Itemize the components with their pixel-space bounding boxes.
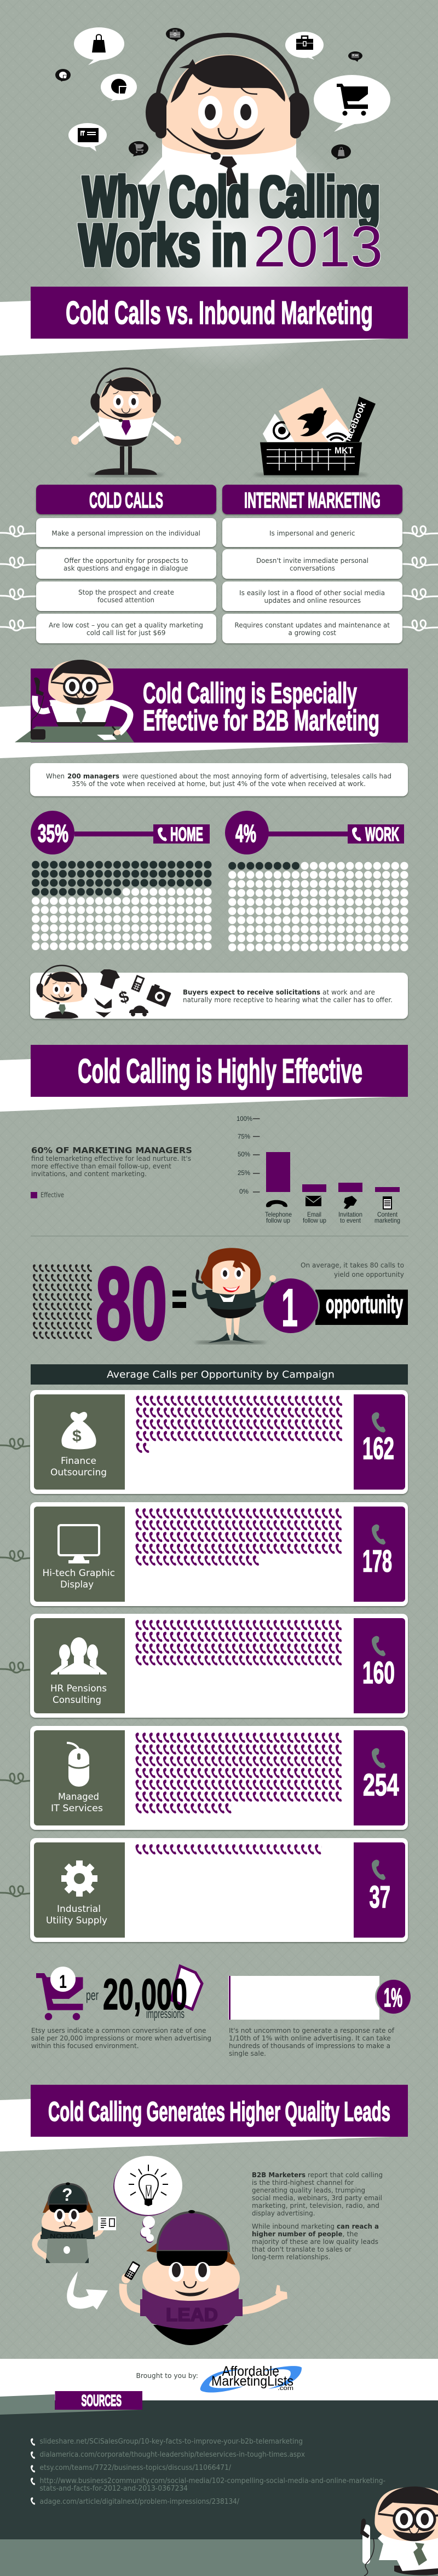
stat: 1 per 20,000: per xyxy=(86,1987,99,2003)
stat: 1% bar: 1% xyxy=(384,1984,402,2013)
character: lead xyxy=(122,2210,287,2345)
text block: b2b marketers: is the third-highest channel for xyxy=(252,2179,354,2187)
phone icons xyxy=(136,1844,322,1856)
panel: cold calls header xyxy=(36,485,216,514)
decorative squiggles xyxy=(0,526,438,631)
text block: etsy: Etsy users indicate a common conversion rate of one xyxy=(31,2027,206,2034)
section: hero xyxy=(55,27,390,372)
arrow xyxy=(67,2271,108,2310)
stat: 1 per 20,000: 1 xyxy=(59,1972,67,1992)
panel: industrial utility supply: Industrial xyxy=(57,1904,101,1915)
source list: etsy.com/teams/7722/business-topics/discuss/11066471/ xyxy=(39,2464,232,2472)
text block: b2b marketers: generating quality leads, trumping xyxy=(252,2187,365,2194)
character: lead: LEAD xyxy=(166,2305,218,2325)
icon: bikini xyxy=(94,998,112,1017)
panel: white swoosh 4 xyxy=(0,2099,400,2151)
callout: buyers expect: Buyers expect to receive solicitations xyxy=(183,988,320,996)
panel: managed it services xyxy=(30,1726,408,1830)
icon: light bulb xyxy=(129,2165,168,2199)
panel: comparison rows: focused attention xyxy=(97,596,154,604)
panel: hr pensions consulting: 160 xyxy=(362,1655,395,1690)
mini bubble: briefcase xyxy=(166,28,185,42)
panel: industrial utility supply xyxy=(30,1838,408,1942)
dot chart: home xyxy=(31,860,212,951)
text block: b2b marketers: display advertising. xyxy=(252,2209,315,2217)
character: normal prospect xyxy=(34,2183,116,2263)
source list xyxy=(31,2438,385,2506)
text block: on average: On average, it takes 80 calls to xyxy=(301,1261,404,1269)
text block: online advertising: single sale. xyxy=(229,2050,266,2057)
text block: b2b marketers: marketing, print, television, radio, and xyxy=(252,2202,379,2209)
legend xyxy=(31,1191,64,1199)
speech bubble: shopping cart xyxy=(314,75,390,132)
bar chart: Invitation xyxy=(338,1211,362,1218)
bar chart: 75% xyxy=(238,1132,250,1140)
mini bubble: news xyxy=(348,51,362,62)
panel: comparison rows: updates and online resources xyxy=(264,597,361,604)
character: standing telemarketer xyxy=(71,369,181,477)
text block: b2b marketers: report that cold calling xyxy=(308,2171,383,2179)
bar chart: 100% xyxy=(237,1115,252,1123)
panel: comparison rows: Is impersonal and generic xyxy=(269,530,355,537)
text block: etsy: within this focused environment. xyxy=(31,2042,139,2050)
phone icons xyxy=(136,1732,343,1815)
heading: cold calls vs inbound xyxy=(31,287,408,339)
stat: 1 opportunity xyxy=(263,1278,408,1338)
bar chart: Telephone xyxy=(265,1211,292,1218)
panel: finance outsourcing: Finance xyxy=(61,1456,96,1467)
stat: 1 per 20,000: 20,000 xyxy=(103,1970,187,2019)
bar chart: Content xyxy=(377,1211,398,1218)
equals sign xyxy=(172,1290,186,1308)
logo: Affordable xyxy=(222,2364,279,2379)
callout: buyers expect: at work and are xyxy=(322,988,375,996)
text block: 60% of managers: more effective than email follow-up, event xyxy=(31,1162,171,1170)
icon: pushpin xyxy=(344,1196,357,1209)
logo xyxy=(200,2364,302,2393)
heading: highly effective xyxy=(31,1045,408,1097)
mini bubble: bag xyxy=(331,144,351,160)
panel: white swoosh 1 xyxy=(0,301,400,356)
thought bubble: lightbulb xyxy=(113,2156,182,2243)
text block: b2b marketers xyxy=(252,2171,383,2261)
heading: sources: SOURCES xyxy=(81,2392,122,2410)
icon: shirt xyxy=(100,969,120,989)
icon: marketing basket xyxy=(253,388,376,477)
character: woman on phone xyxy=(194,1248,276,1344)
text block: 60% of managers: 60% OF MARKETING MANAGERS xyxy=(31,1145,192,1155)
icon: notepad xyxy=(383,1196,392,1210)
panel: sponsor band: Brought to you by: xyxy=(136,2372,198,2380)
character: normal prospect: NORMAL xyxy=(50,2232,86,2240)
callout: 200 managers: When xyxy=(46,772,65,780)
panel: hi-tech graphic display: 178 xyxy=(362,1544,392,1579)
callout: 200 managers: 200 managers xyxy=(67,772,119,780)
dot chart: work xyxy=(228,861,409,952)
icon: mobile phone xyxy=(131,975,145,992)
icon: camera xyxy=(146,983,172,1007)
panel: finance outsourcing: 162 xyxy=(362,1431,394,1466)
stat: 1 per 20,000: impressions xyxy=(146,2007,185,2021)
panel: comparison rows: ask questions and engage in dialogue xyxy=(64,565,188,572)
panel: finance outsourcing: Outsourcing xyxy=(50,1467,107,1478)
panel: internet marketing header xyxy=(222,485,402,514)
panel: industrial utility supply: Utility Supply xyxy=(46,1915,107,1926)
phone icons xyxy=(136,1395,343,1454)
source list: slideshare.net/SCiSalesGroup/10-key-facts-to-improve-your-b2b-telemarketing xyxy=(39,2438,303,2446)
stat: 1 per 20,000 xyxy=(36,1966,202,2021)
icon: document xyxy=(171,1966,202,2009)
stat: 35% home xyxy=(31,811,210,854)
bar chart: 50% xyxy=(238,1150,250,1158)
text block: b2b marketers: , the xyxy=(343,2230,358,2238)
mini bubble: cart xyxy=(129,141,148,156)
stat: 35% home: 35% xyxy=(38,819,68,847)
stat: 4% work xyxy=(225,811,404,854)
source list: http://www.business2community.com/social-media/102-compelling-social-media-and-online-marketing- xyxy=(39,2477,385,2485)
text block: b2b marketers: that don't translate to sales or xyxy=(252,2246,351,2253)
text block: 60% of managers xyxy=(31,1145,192,1178)
panel: comparison rows xyxy=(36,518,402,643)
text block: b2b marketers: While inbound marketing xyxy=(252,2223,335,2230)
speech bubble: briefcase xyxy=(285,32,324,60)
bar chart: follow up xyxy=(266,1217,290,1224)
panel: hi-tech graphic display: Hi-tech Graphic xyxy=(43,1568,115,1579)
panel: comparison rows: cold call list for just $69 xyxy=(87,629,165,637)
text block: b2b marketers: B2B Marketers xyxy=(252,2171,306,2179)
logo: .com xyxy=(278,2385,293,2392)
source list: adage.com/article/digitalnext/problem-impressions/238134/ xyxy=(39,2498,240,2506)
bar chart: marketing xyxy=(374,1217,400,1224)
panel: comparison rows: Is easily lost in a flood of other social media xyxy=(239,589,385,597)
phone icons xyxy=(136,1620,343,1667)
title year: 2013 xyxy=(253,214,383,279)
text block: b2b marketers: social media, webinars, 3rd party email xyxy=(252,2194,382,2202)
panel: hi-tech graphic display: Display xyxy=(60,1579,94,1590)
panel: comparison rows: Requires constant updates and maintenance at xyxy=(234,621,390,629)
mini bubble: pie chart xyxy=(55,69,71,82)
heading: sources xyxy=(55,2391,142,2410)
panel: finance outsourcing xyxy=(30,1390,408,1494)
panel: hr pensions consulting: HR Pensions xyxy=(50,1683,107,1694)
stat: 1% bar xyxy=(228,1976,411,2020)
text block: on average xyxy=(301,1261,404,1278)
icon: gear xyxy=(54,1853,105,1904)
callout: 200 managers xyxy=(30,763,408,796)
text block: b2b marketers: majority of these are low quality leads xyxy=(252,2238,378,2246)
panel: hi-tech graphic display xyxy=(30,1502,408,1606)
panel: cold calls header: COLD CALLS xyxy=(89,489,163,513)
callout: 200 managers: 35% of the vote when received at home, but just 4% of the vote when received at work. xyxy=(72,780,366,788)
heading: average calls: Average Calls per Opportunity by Campaign xyxy=(107,1369,335,1381)
panel: comparison rows: Offer the opportunity for prospects to xyxy=(64,557,188,565)
source list: dialamerica.com/corporate/thought-leadership/teleservices-in-tough-times.aspx xyxy=(39,2451,305,2459)
icon: mouse xyxy=(67,1743,89,1787)
phone icons xyxy=(136,1508,343,1567)
speech bubble: pie chart xyxy=(101,74,137,101)
stat: 35% home: HOME xyxy=(170,824,203,845)
bar chart: follow up xyxy=(303,1217,326,1224)
panel: hr pensions consulting: Consulting xyxy=(53,1695,101,1706)
icon: envelope xyxy=(306,1196,321,1206)
text block: b2b marketers: higher number of people xyxy=(252,2230,343,2238)
panel: industrial utility supply: 37 xyxy=(369,1880,390,1915)
heading: quality leads xyxy=(31,2085,408,2137)
text block: online advertising: hundreds of thousands of impressions to make a xyxy=(229,2042,390,2050)
bar chart: Email xyxy=(307,1211,321,1218)
title: Works in xyxy=(79,212,247,279)
panel: comparison rows: conversations xyxy=(290,565,335,572)
text block: 60% of managers: find telemarketing effective for lead nurture. It's xyxy=(31,1155,191,1162)
bar chart xyxy=(237,1115,400,1224)
text block: online advertising: 1/10th of 1% with online advertising. It can take xyxy=(229,2034,391,2042)
stat: 1 opportunity: 1 xyxy=(281,1278,298,1338)
character: headset man xyxy=(36,966,87,1019)
icon: business card xyxy=(98,2217,116,2230)
panel: comparison rows: Make a personal impression on the individual xyxy=(51,530,200,537)
icon: dollar: $ xyxy=(117,987,131,1008)
icon: marketing basket: MKT xyxy=(335,445,354,456)
speech bubble: shopping bag xyxy=(74,27,124,65)
callout: 200 managers: were questioned about the most annoying form of advertising, telesales calls had xyxy=(123,772,391,780)
character: normal prospect: ? xyxy=(62,2185,73,2205)
text block: 60% of managers: invitations, and content marketing. xyxy=(31,1170,147,1178)
icon: money bag: $ xyxy=(72,1427,82,1445)
big number 80: 80 xyxy=(96,1247,167,1360)
text block: on average: yield one opportunity xyxy=(334,1271,404,1278)
bar chart: 25% xyxy=(238,1169,250,1177)
panel: comparison rows: Doesn't invite immediate personal xyxy=(256,557,368,565)
character: glasses man footer xyxy=(360,2486,438,2576)
text block: etsy xyxy=(31,2027,211,2050)
panel: managed it services: IT Services xyxy=(51,1803,103,1814)
text block: b2b marketers: long-term relationships. xyxy=(252,2253,331,2261)
stat: 4% work: WORK xyxy=(365,824,399,845)
callout: buyers expect: naturally more receptive to hearing what the caller has to offer. xyxy=(183,996,393,1004)
stat: 4% work: 4% xyxy=(235,819,256,847)
heading: B2B xyxy=(31,668,408,743)
panel: managed it services: 254 xyxy=(363,1767,399,1802)
facebook label: facebook xyxy=(342,400,368,443)
legend: Effective xyxy=(41,1191,64,1199)
icon: telephone xyxy=(266,1200,287,1207)
panel: white swoosh 2 xyxy=(0,706,400,758)
bar chart: 0% xyxy=(239,1188,249,1195)
title xyxy=(79,165,380,279)
decorative card squiggles xyxy=(0,1439,36,1897)
bar chart: to event xyxy=(340,1217,361,1224)
icon: monitor xyxy=(59,1525,99,1563)
text block: online advertising: It's not uncommon to generate a response rate of xyxy=(229,2027,395,2034)
phone grid: 80 calls xyxy=(33,1264,93,1341)
character: glasses man at desk xyxy=(15,660,134,742)
heading: average calls xyxy=(31,1364,408,1385)
panel: managed it services: Managed xyxy=(58,1792,99,1802)
panel: white swoosh 3 xyxy=(0,1059,400,1112)
source list: stats-and-facts-for-2012-and-2013-0367234 xyxy=(39,2485,188,2493)
panel: comparison rows: a growing cost xyxy=(288,629,336,637)
panel: sponsor band xyxy=(0,2359,438,2400)
logo: MarketingLists xyxy=(211,2374,293,2389)
text block: etsy: sale per 20,000 impressions or more when advertising xyxy=(31,2034,211,2042)
panel: sources xyxy=(0,2391,438,2576)
panel: comparison rows: Stop the prospect and create xyxy=(78,589,174,596)
panel: comparison rows: Are low cost – you can get a quality marketing xyxy=(49,621,203,629)
character: telemarketer xyxy=(139,35,315,189)
icon: twitter bird xyxy=(297,407,327,437)
icon: money bag xyxy=(61,1412,96,1450)
text block: online advertising xyxy=(229,2027,395,2057)
speech bubble: news xyxy=(68,123,107,152)
panel: hr pensions consulting xyxy=(30,1614,408,1718)
callout: buyers expect xyxy=(30,966,408,1019)
text block: b2b marketers: can reach a xyxy=(337,2223,379,2230)
icon: car xyxy=(129,1005,148,1016)
icon: people xyxy=(51,1637,107,1674)
icon: mobile phone xyxy=(124,2261,140,2281)
